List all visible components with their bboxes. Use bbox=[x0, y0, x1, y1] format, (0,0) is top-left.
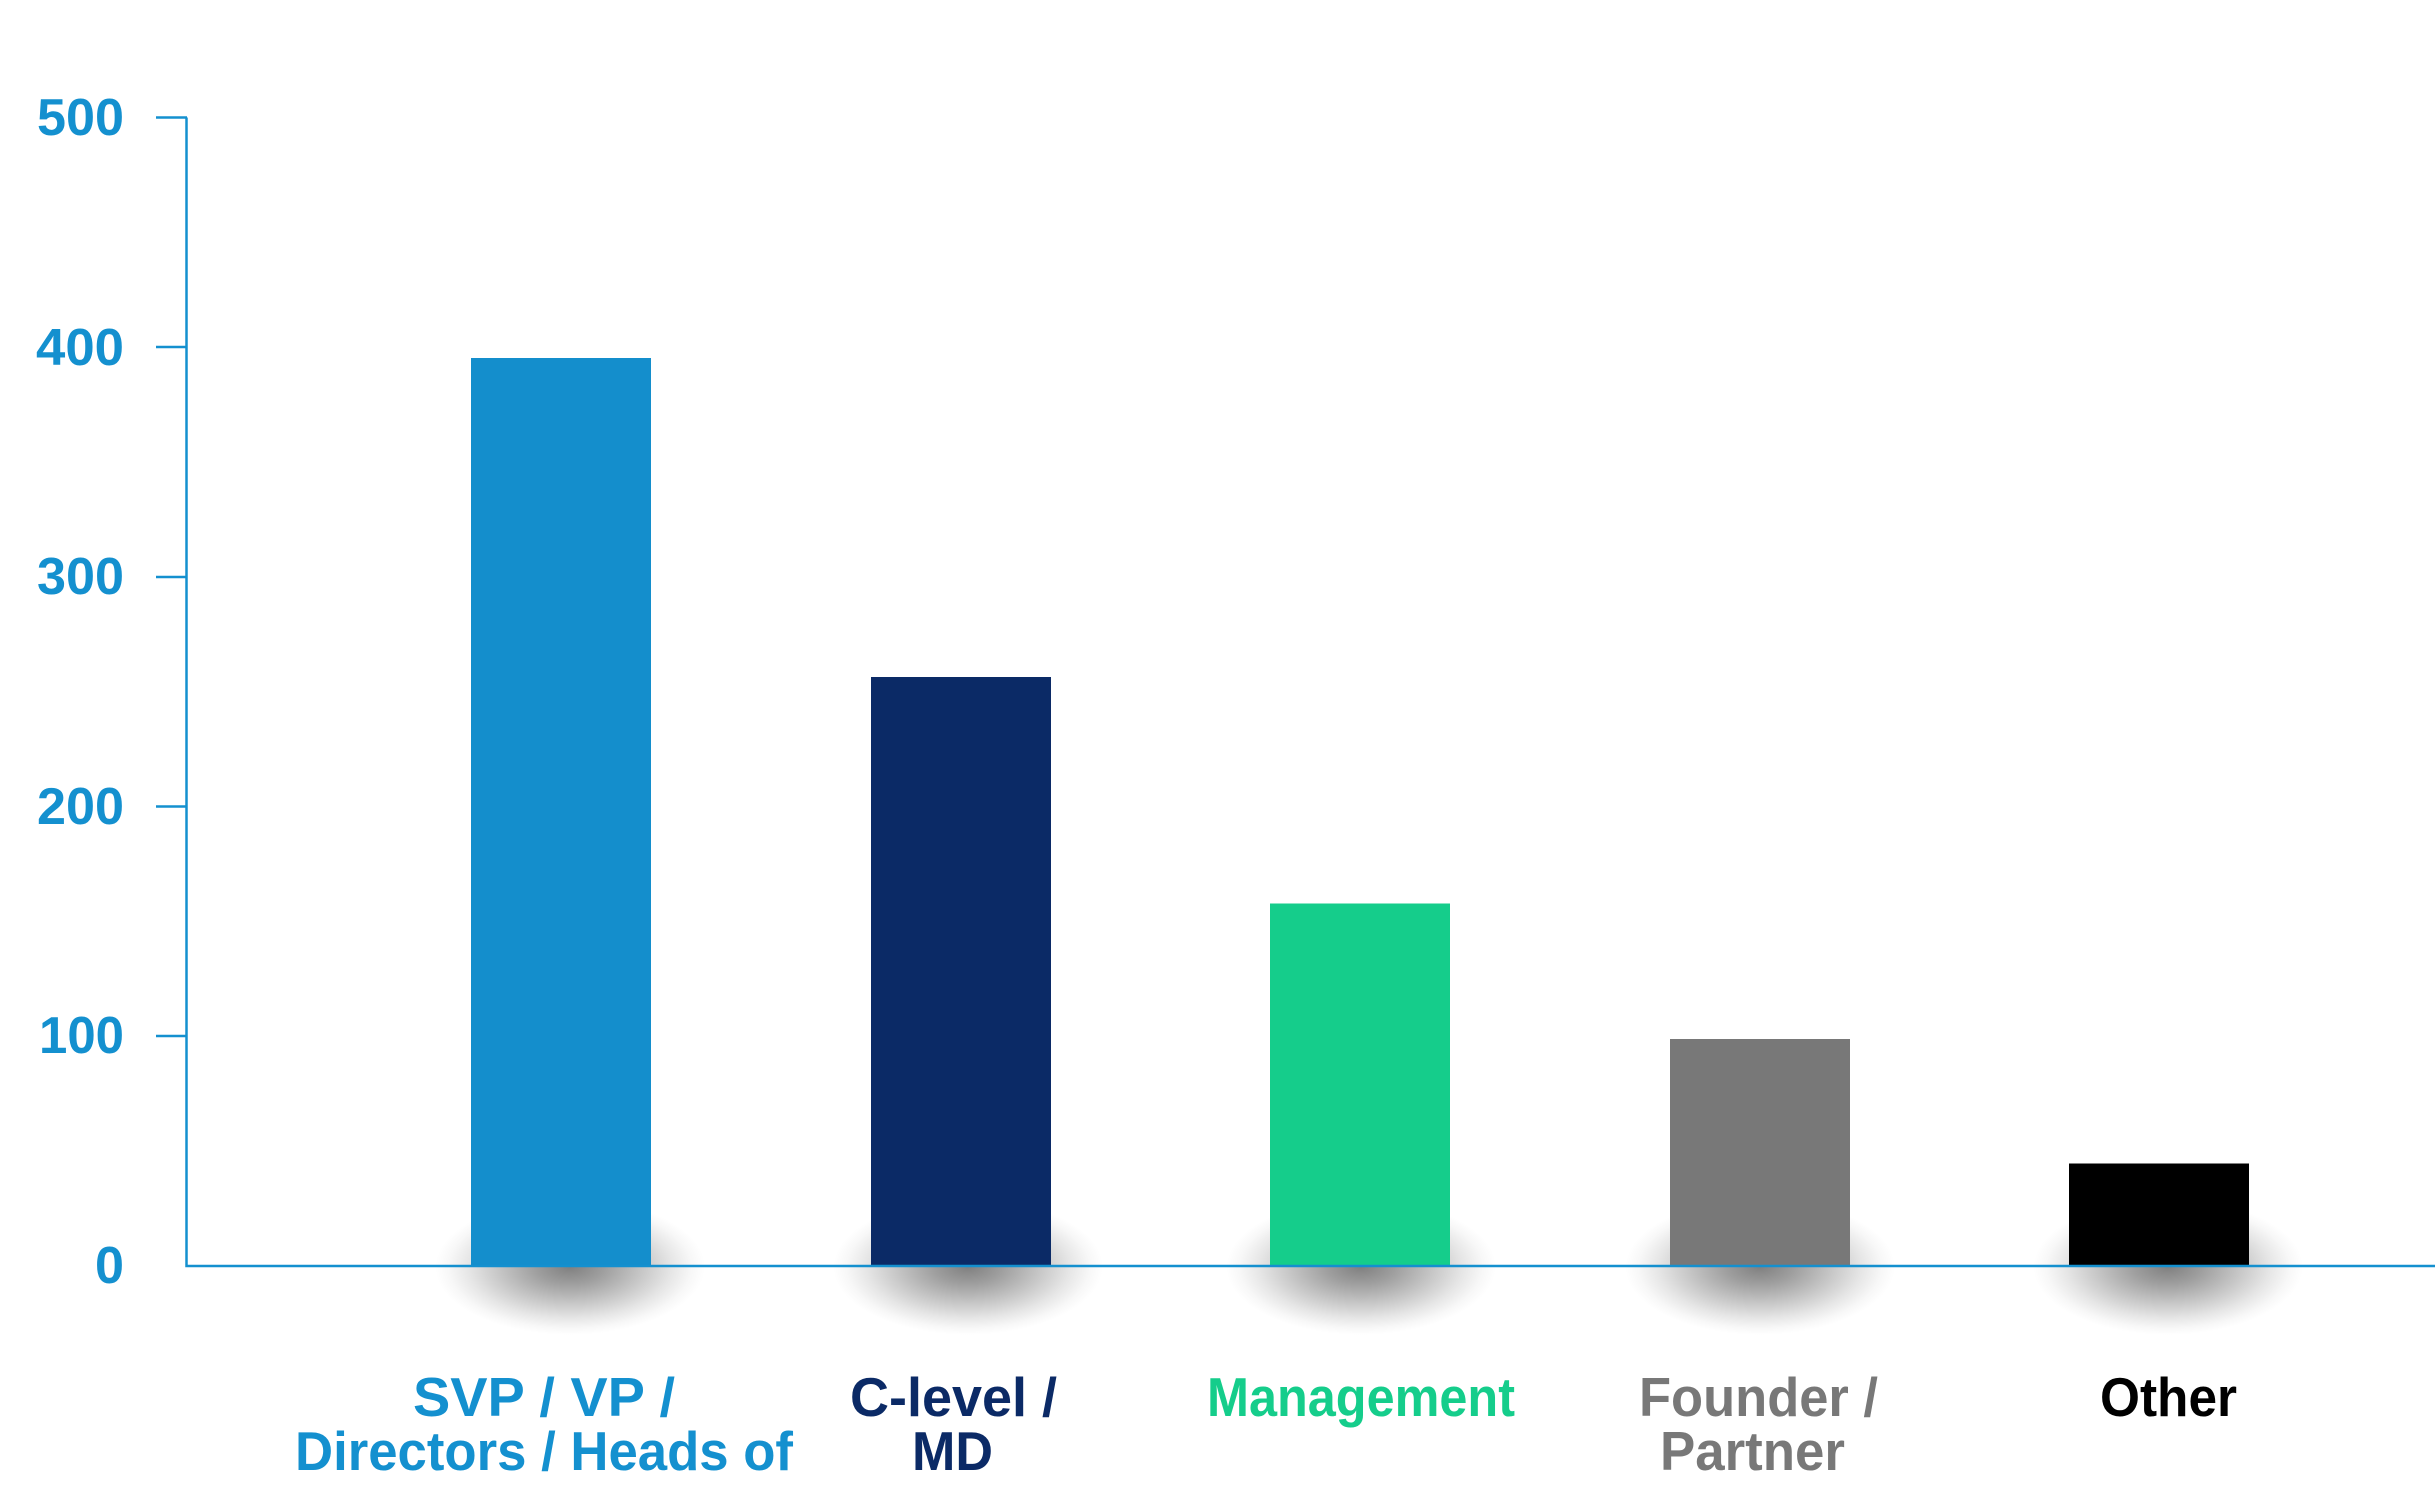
label: C-level / MD: C-level / bbox=[850, 1366, 1057, 1428]
y axis labels: 400 bbox=[36, 319, 124, 377]
bar: Management bbox=[1270, 904, 1450, 1266]
y axis labels: 300 bbox=[37, 548, 124, 606]
label: Founder / Partner: Partner bbox=[1660, 1420, 1845, 1482]
y axis labels: 500 bbox=[37, 89, 124, 147]
y axis labels: 200 bbox=[37, 778, 124, 836]
y axis labels: 0 bbox=[95, 1237, 124, 1295]
label: SVP / VP / Directors / Heads of: SVP / VP / bbox=[413, 1366, 675, 1428]
bar: SVP / VP / Directors / Heads of bbox=[471, 358, 651, 1266]
label: Other: Other bbox=[2100, 1366, 2237, 1428]
label: SVP / VP / Directors / Heads of: Directors / Heads of bbox=[295, 1420, 794, 1482]
label: Management: Management bbox=[1207, 1366, 1515, 1428]
bar shadows bbox=[435, 1199, 2303, 1335]
label: C-level / MD: MD bbox=[912, 1420, 993, 1482]
y axis labels bbox=[36, 89, 124, 1295]
bar: Other bbox=[2069, 1164, 2249, 1266]
label: SVP / VP / Directors / Heads of bbox=[295, 1366, 794, 1482]
bar: Founder / Partner bbox=[1670, 1039, 1850, 1266]
bar: C-level / MD bbox=[871, 677, 1051, 1266]
y axis and x axis bbox=[156, 118, 2435, 1266]
label: C-level / MD bbox=[850, 1366, 1057, 1482]
label: Founder / Partner: Founder / bbox=[1639, 1366, 1878, 1428]
label: Founder / Partner bbox=[1639, 1366, 1878, 1482]
y axis labels: 100 bbox=[39, 1007, 124, 1065]
